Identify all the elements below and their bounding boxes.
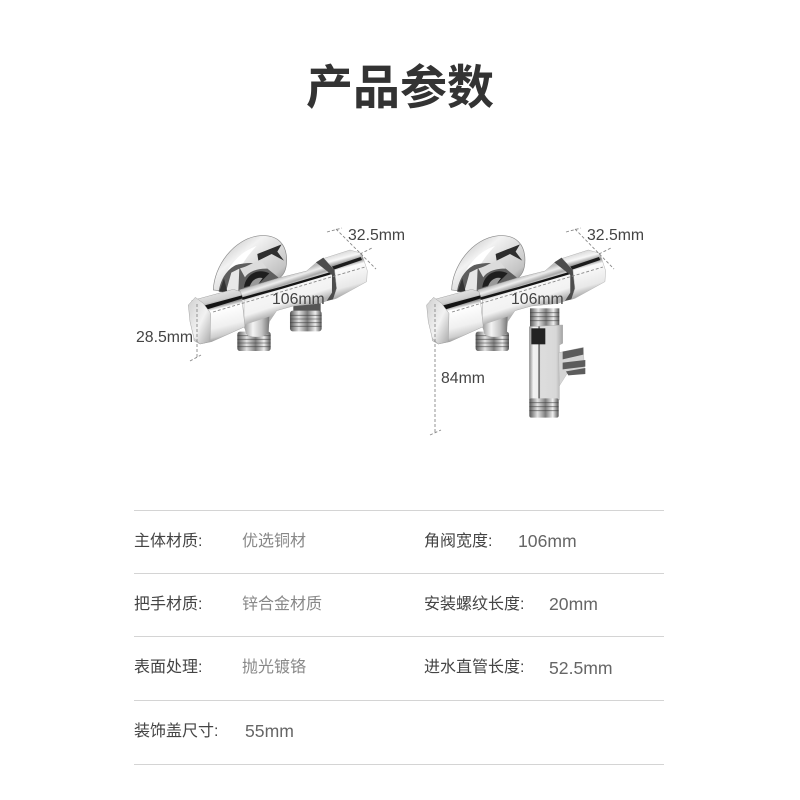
right handle (562, 250, 606, 299)
dimension label: 106mm right: 106mm (511, 291, 564, 308)
tee adapter (529, 308, 585, 418)
spec: inlet pipe length: 进水直管长度: (424, 659, 524, 676)
spec: handle material: 把手材质: (134, 596, 202, 613)
valve two: angle valve with tee adapter (427, 228, 614, 435)
left handle cap (430, 289, 483, 344)
front outlet thread (476, 332, 509, 351)
right handle (324, 250, 367, 299)
dimension label: 32.5mm right: 32.5mm (587, 227, 644, 244)
spec value: inlet pipe length: 52.5mm (549, 658, 613, 678)
wall plate (452, 236, 525, 293)
spec: thread length: 安装螺纹长度: (424, 596, 524, 613)
dimension label: 84mm: 84mm (441, 370, 485, 387)
main tube (239, 262, 333, 336)
spec value: surface finish: 抛光镀铬 (242, 659, 306, 676)
spec value: thread length: 20mm (549, 594, 598, 614)
front outlet thread (237, 332, 271, 351)
dimension label: 28.5mm: 28.5mm (136, 329, 193, 346)
spec value: valve width: 106mm (518, 531, 577, 551)
spec value: handle material: 锌合金材质 (242, 596, 322, 613)
spec: valve width: 角阀宽度: (424, 533, 492, 550)
right handle collar (554, 258, 575, 301)
dimension label: 32.5mm left: 32.5mm (348, 227, 405, 244)
spec: cover size: 装饰盖尺寸: (134, 723, 218, 740)
title: 产品参数 (306, 61, 494, 114)
specification table (134, 510, 664, 765)
spec: surface finish: 表面处理: (134, 659, 202, 676)
right handle collar (316, 258, 337, 301)
spec value: cover size: 55mm (245, 721, 294, 741)
main tube (478, 262, 572, 336)
dimension guides (430, 228, 614, 435)
wall plate (213, 236, 287, 293)
left handle cap (192, 289, 245, 344)
back outlet (293, 303, 321, 313)
spec: body material: 主体材质: (134, 533, 202, 550)
valve one: twin outlet angle valve (188, 228, 376, 361)
dimension label: 106mm left: 106mm (272, 291, 325, 308)
spec value: body material: 优选铜材 (242, 533, 306, 550)
dimension guides (190, 228, 376, 361)
